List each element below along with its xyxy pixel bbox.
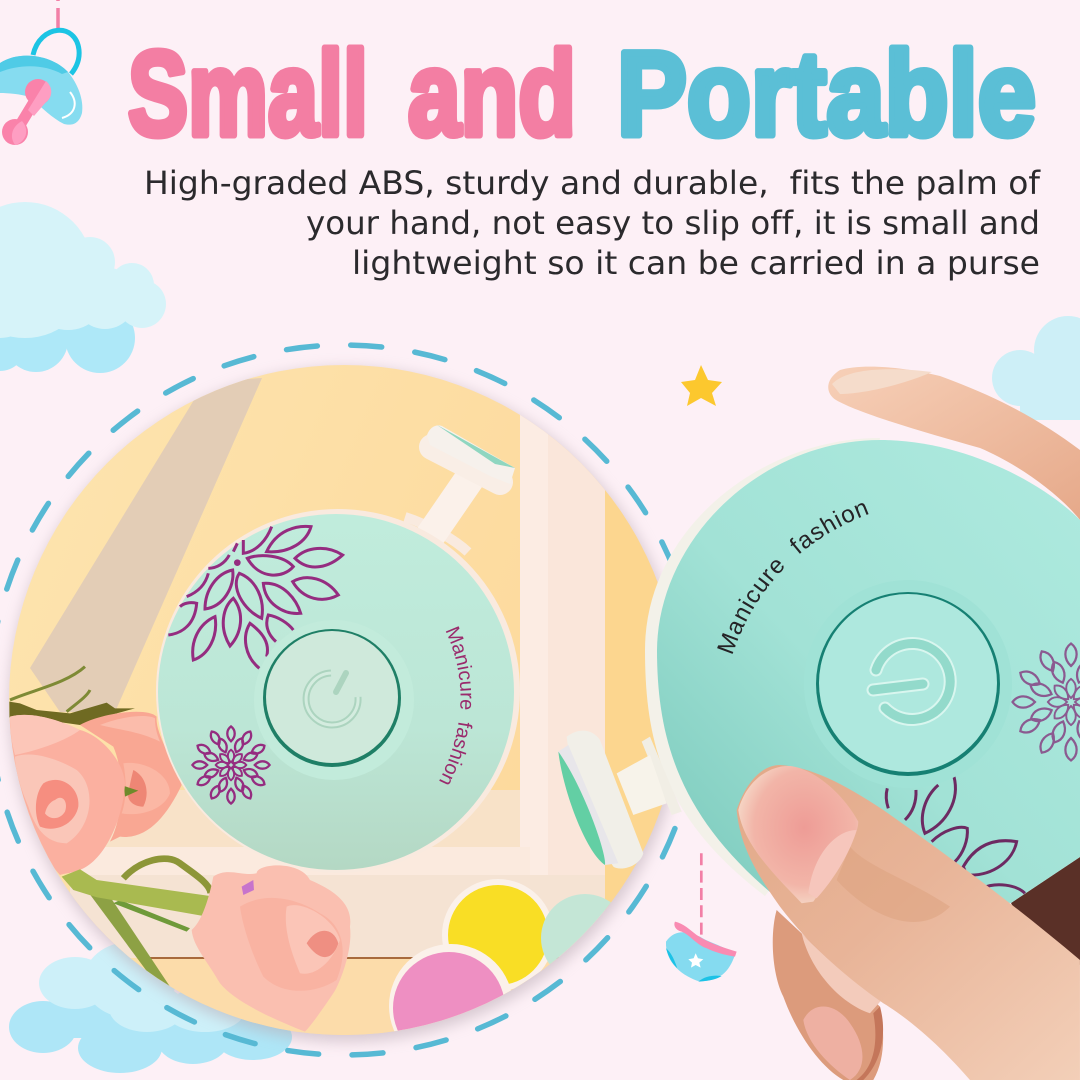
dark palm bbox=[1011, 857, 1080, 965]
device body bbox=[156, 509, 520, 873]
flower print bottom bbox=[886, 777, 1025, 893]
button halo bbox=[254, 620, 414, 780]
large flower print bbox=[168, 526, 343, 668]
cloud: upper right bbox=[992, 316, 1080, 420]
hand and second device bbox=[558, 366, 1080, 1080]
description text: lightweight so it can be carried in a purse bbox=[352, 244, 1040, 282]
filter discs bbox=[389, 879, 611, 1032]
title bbox=[128, 27, 1036, 161]
title: and bbox=[408, 27, 576, 161]
icon: pacifier bbox=[0, 0, 82, 145]
photo: product on shelf bbox=[9, 365, 662, 1035]
flower stems and roses bbox=[9, 667, 350, 1032]
dashed circle bbox=[0, 345, 699, 1055]
flower print right bbox=[1012, 644, 1080, 760]
cloud: lower left bbox=[9, 942, 292, 1073]
file head bbox=[405, 425, 515, 552]
device label: Manicure fashion bbox=[717, 503, 868, 654]
upper fingernail bbox=[832, 369, 932, 394]
description text bbox=[144, 164, 1041, 282]
product: round manicure device bbox=[156, 425, 520, 870]
cloud: upper left bbox=[0, 202, 166, 373]
device rim bbox=[645, 438, 880, 896]
description text: your hand, not easy to slip off, it is small and bbox=[306, 204, 1040, 242]
device body bbox=[657, 440, 1080, 903]
icon: star bbox=[681, 365, 722, 406]
device label: Manicure fashion bbox=[439, 626, 472, 784]
shelf frame bbox=[70, 400, 685, 1040]
description text: High-graded ABS, sturdy and durable, fits the palm of bbox=[144, 164, 1041, 202]
tan shelf panel bbox=[30, 378, 262, 712]
photo shadow bbox=[9, 368, 683, 1042]
power button bbox=[263, 629, 401, 767]
small flower print bbox=[192, 726, 270, 804]
title: Small bbox=[128, 27, 368, 161]
lower finger bbox=[773, 910, 883, 1080]
power button bbox=[804, 580, 1012, 788]
upper finger bbox=[828, 367, 1080, 520]
file head bbox=[558, 731, 682, 869]
string and diaper charm bbox=[666, 853, 737, 982]
thumb bbox=[737, 765, 1080, 1080]
